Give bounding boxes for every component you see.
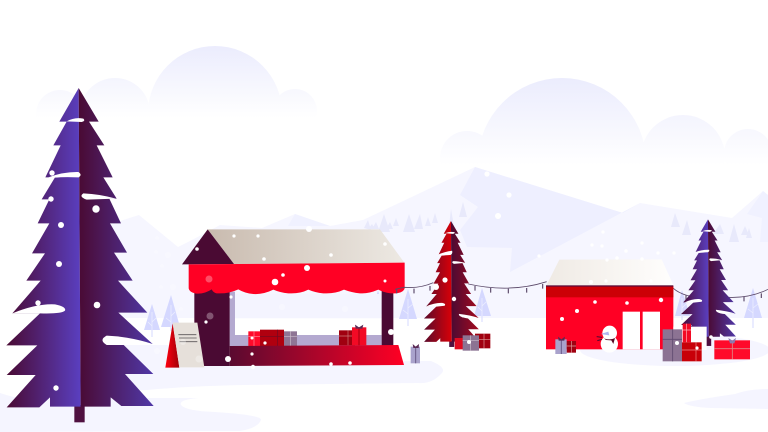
snow patch: shed	[580, 334, 768, 366]
snowflakes	[35, 170, 713, 391]
gifts by shed	[555, 337, 576, 354]
right half	[79, 88, 154, 407]
snow patch: bottom right	[684, 389, 768, 409]
gifts on counter	[248, 325, 366, 346]
snow patch: bottom left	[0, 393, 261, 432]
gable	[182, 229, 234, 264]
pale trees in the middle distance	[144, 288, 762, 337]
snow ground	[0, 318, 768, 432]
snow patch: stall foreground	[110, 345, 443, 392]
market stall	[165, 229, 405, 368]
gift by stall	[411, 344, 420, 363]
sign	[165, 323, 204, 368]
shed roof	[547, 259, 673, 285]
cloud: right	[430, 78, 768, 250]
shed lintel	[546, 287, 673, 297]
blue tree	[681, 219, 736, 346]
left post	[194, 287, 230, 366]
cloud: left	[30, 46, 330, 188]
counter	[230, 345, 404, 366]
lavender inner frame	[230, 292, 382, 347]
distant tree line	[364, 202, 752, 242]
trunk	[74, 405, 85, 422]
trunk	[706, 336, 711, 346]
light string: left	[395, 282, 547, 293]
big purple tree	[6, 88, 154, 422]
red tree	[424, 221, 479, 347]
gifts by blue tree	[663, 324, 750, 361]
trunk	[449, 341, 454, 347]
gifts by red tree	[455, 334, 490, 351]
shed wall	[546, 286, 673, 349]
snow caps	[12, 118, 153, 345]
shed	[546, 259, 707, 353]
snowman	[597, 326, 618, 353]
back wall	[235, 294, 382, 318]
left half	[6, 88, 81, 407]
mountains	[60, 167, 768, 320]
right post	[382, 288, 393, 347]
snow drift at door	[673, 327, 707, 350]
roof	[208, 229, 404, 264]
light string: right	[673, 288, 768, 303]
doors	[623, 312, 660, 349]
awning	[189, 263, 405, 294]
